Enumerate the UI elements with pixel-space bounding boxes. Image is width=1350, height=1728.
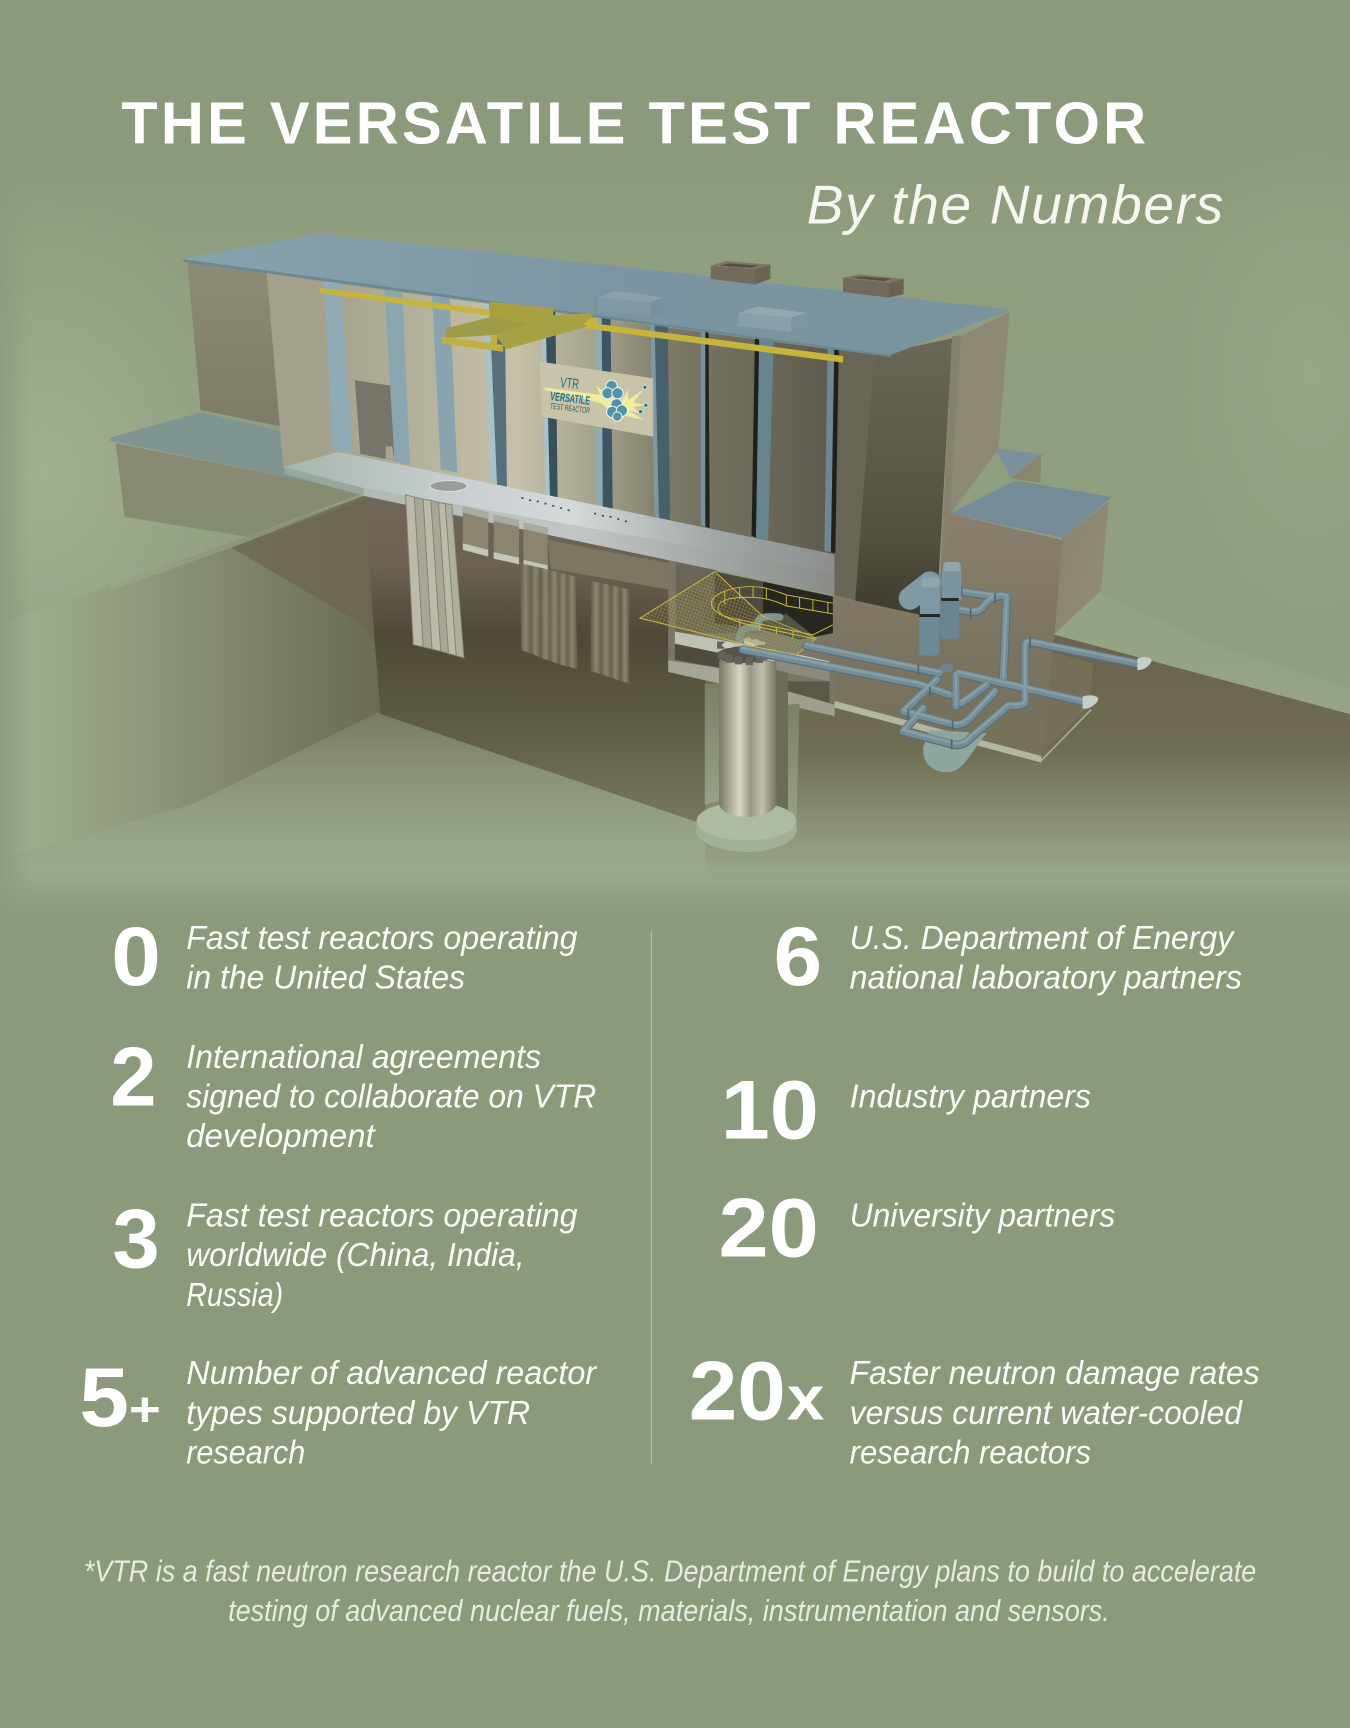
sign text: VERSATILE: [550, 389, 591, 408]
pumps: [910, 562, 961, 672]
sign text: [550, 375, 591, 415]
stat: 10 industry partners: Industry partners: [850, 1079, 1091, 1116]
concrete bins: [463, 506, 548, 572]
stat: 5+ advanced reactor types: [79, 1350, 598, 1472]
footnote: testing of advanced nuclear fuels, materials, instrumentation and sensors.: [228, 1593, 1110, 1628]
vessel head: [717, 637, 769, 665]
stat: 10 industry partners: [721, 1062, 1091, 1156]
stat: 5+ advanced reactor types: research: [186, 1435, 305, 1472]
back annex: [997, 449, 1047, 483]
pipe ends: [1083, 657, 1152, 709]
stat: 2 international agreements: 2: [110, 1029, 156, 1123]
hall concrete: [668, 560, 835, 716]
stat: 6 national laboratory partners: [774, 909, 1242, 1003]
footnote: [84, 1553, 1256, 1628]
stat: 2 international agreements: signed to collaborate on VTR: [186, 1079, 596, 1116]
stat: 5+ advanced reactor types: 5: [79, 1350, 129, 1444]
sign text: VTR: [559, 375, 580, 393]
stat: 0 fast test reactors in the US: 0: [111, 909, 161, 1003]
stat: 20 university partners: 20: [719, 1180, 819, 1274]
overhead crane: [442, 302, 598, 352]
sign text: TEST REACTOR: [550, 401, 591, 415]
wall section below floor: [548, 540, 674, 591]
foundation strip: [834, 701, 1041, 763]
stat: 5+ advanced reactor types: +: [129, 1383, 161, 1437]
sign logo burst: [545, 380, 648, 422]
stat: 20x faster neutron damage rates: 20: [689, 1343, 786, 1437]
stat: 6 national laboratory partners: U.S. Department of Energy: [850, 920, 1236, 957]
piping: [743, 562, 1152, 772]
stat: 3 fast test reactors worldwide: Russia): [186, 1277, 283, 1314]
vessel: [719, 661, 776, 817]
stat: 0 fast test reactors in the US: [111, 909, 578, 1003]
pipe runs: [743, 590, 1138, 745]
stat: 20 university partners: University partners: [850, 1198, 1115, 1235]
stat: 6 national laboratory partners: national laboratory partners: [850, 960, 1242, 997]
title: THE VERSATILE TEST REACTOR: [121, 89, 1146, 156]
backdrop glow: [0, 132, 1350, 915]
stat: 20x faster neutron damage rates: [689, 1343, 1260, 1472]
stat: 20x faster neutron damage rates: versus current water-cooled: [850, 1395, 1244, 1432]
platform railing: [711, 587, 833, 639]
recessed end wall: [834, 335, 961, 615]
stat: 0 fast test reactors in the US: Fast test reactors operating: [186, 920, 578, 957]
stat: 3 fast test reactors worldwide: worldwide (China, India,: [186, 1237, 525, 1274]
building wall: [267, 273, 840, 554]
stat: 5+ advanced reactor types: types supported by VTR: [186, 1395, 530, 1432]
stat: 20x faster neutron damage rates: research reactors: [850, 1435, 1091, 1472]
storage tubes group 1: [406, 495, 464, 658]
stat: 0 fast test reactors in the US: in the United States: [186, 960, 465, 997]
stat: 3 fast test reactors worldwide: Fast test reactors operating: [186, 1198, 578, 1235]
stat: 2 international agreements: International agreements: [186, 1039, 541, 1076]
stat: 2 international agreements: development: [186, 1118, 376, 1155]
stat: 20x faster neutron damage rates: Faster neutron damage rates: [850, 1355, 1260, 1392]
stat: 3 fast test reactors worldwide: 3: [112, 1191, 160, 1285]
storage tubes group 3: [591, 581, 629, 683]
right side wall: [950, 312, 1009, 515]
stat: 3 fast test reactors worldwide: [112, 1191, 578, 1314]
left building wall: [187, 261, 281, 426]
column divider: [651, 931, 652, 1465]
reactor hall and vessel: [640, 560, 835, 852]
refuelling pipe stubs: [740, 617, 780, 640]
stat: 2 international agreements: [110, 1029, 596, 1155]
stat: 10 industry partners: 10: [721, 1062, 819, 1156]
annex roof: [950, 480, 1112, 538]
foreground fades: [0, 154, 1350, 915]
stat: 5+ advanced reactor types: Number of advanced reactor: [186, 1355, 598, 1392]
annex right wall: [1049, 501, 1109, 650]
low left block: [110, 412, 364, 537]
door: [355, 380, 395, 461]
pump flanges: [908, 586, 1030, 749]
refuelling platform mesh: [640, 572, 816, 656]
stat: 6 national laboratory partners: 6: [774, 909, 822, 1003]
lower right block: [834, 514, 1062, 760]
structural columns: [324, 281, 839, 553]
roof vents: [597, 261, 904, 332]
underground excavation: [0, 496, 1350, 915]
crane rail: [320, 288, 843, 363]
stat: 20x faster neutron damage rates: x: [787, 1364, 824, 1433]
VTR sign: [540, 362, 653, 437]
reactor shaft: [696, 670, 800, 852]
illustration: Versatile Test Reactor cutaway: [0, 132, 1350, 915]
storage tubes group 2: [520, 563, 577, 669]
subtitle: By the Numbers: [807, 174, 1223, 236]
stat: 20 university partners: [719, 1180, 1115, 1274]
pipe bulge: [923, 730, 987, 772]
floor slab: [283, 452, 834, 595]
roof: [182, 234, 1012, 357]
